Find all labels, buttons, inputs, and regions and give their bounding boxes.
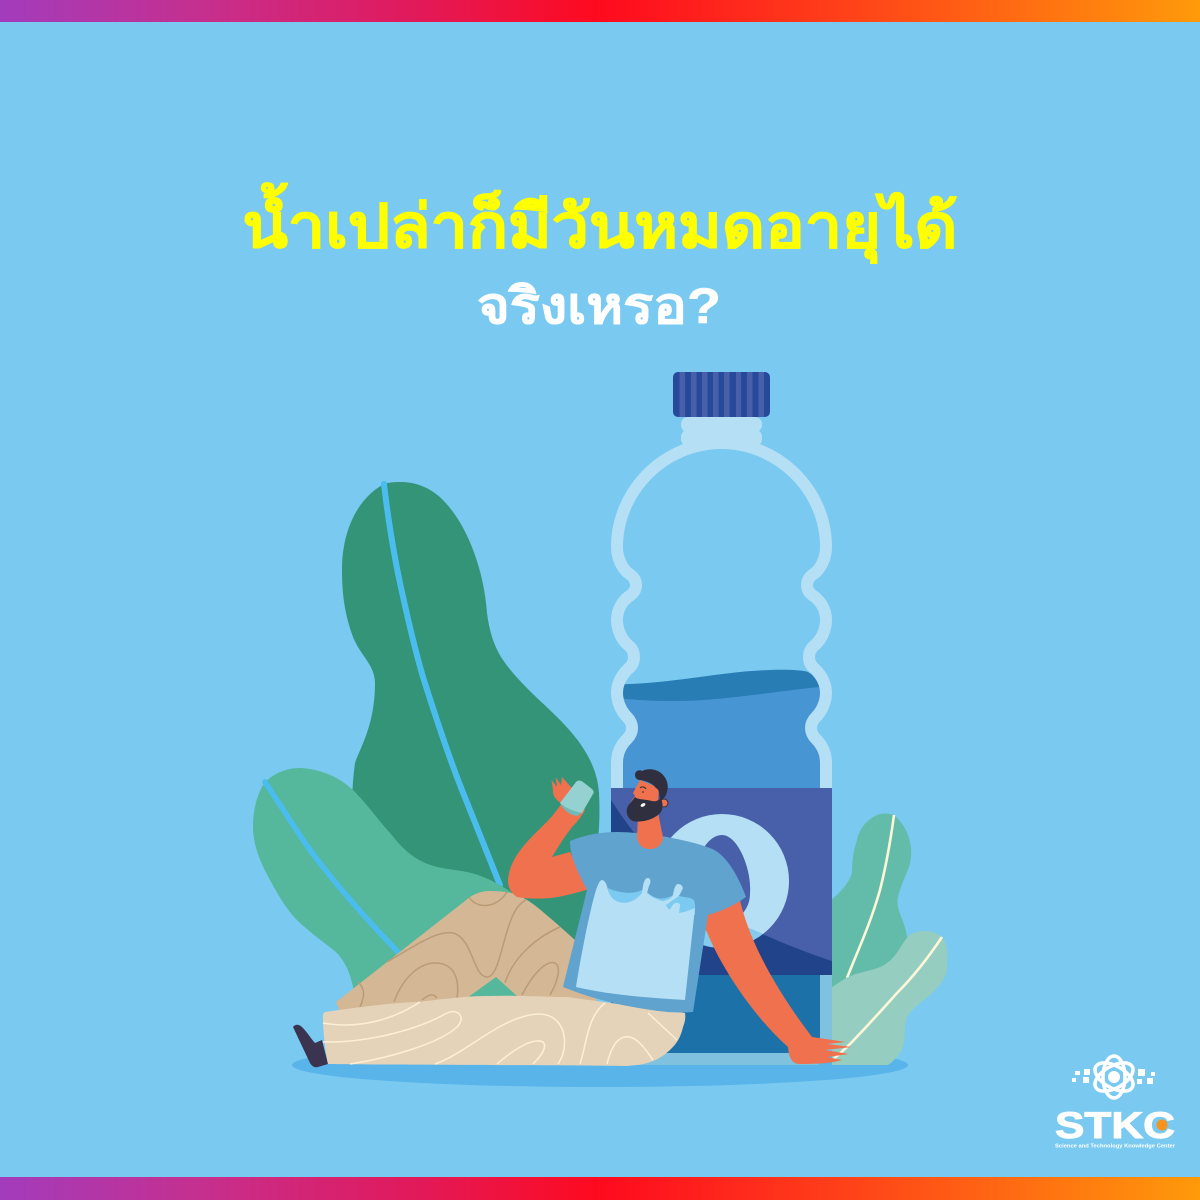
title: จริงเหรอ?	[477, 278, 721, 334]
front leg	[323, 996, 685, 1066]
other arm	[695, 900, 852, 1064]
title	[242, 182, 958, 334]
bottle base	[611, 975, 832, 1065]
leaf: large dark green	[342, 482, 599, 1000]
man drinking water	[253, 768, 852, 1067]
water bottle	[605, 372, 835, 1065]
leaf vein: right teal	[847, 815, 894, 978]
leaf vein: right pale	[827, 937, 942, 1065]
logo orange dot	[1156, 1120, 1168, 1130]
head	[627, 769, 668, 822]
front leg contour lines	[323, 1002, 677, 1064]
water in bottle	[623, 670, 820, 788]
bottle cap	[673, 372, 770, 417]
logo: STKC	[1055, 1056, 1176, 1150]
splash on shirt, back	[608, 888, 695, 915]
bottle label	[611, 788, 832, 975]
logo tagline: Science and Technology Knowledge Center	[1055, 1144, 1176, 1150]
illustration: ground shadow	[292, 1043, 908, 1087]
logo wordmark: STKC	[1055, 1105, 1175, 1146]
bottle outline	[617, 443, 826, 790]
t-shirt	[563, 832, 746, 1013]
back leg	[336, 891, 600, 1012]
green gap between legs	[467, 977, 517, 998]
cup	[560, 780, 594, 816]
raised arm	[508, 803, 590, 899]
leaf: light green	[253, 768, 520, 1000]
raised hand	[552, 777, 578, 812]
eye	[640, 787, 646, 792]
mouth	[640, 802, 646, 808]
back leg contour lines	[358, 892, 560, 1007]
face	[630, 780, 659, 803]
title: น้ำเปล่าก็มีวันหมดอายุได้	[242, 182, 958, 264]
leaf: right teal	[832, 814, 912, 987]
leaf vein: large leaf	[384, 484, 500, 885]
right plant	[825, 814, 947, 1065]
beard	[627, 797, 662, 822]
neck front over shirt	[637, 832, 663, 849]
neck	[637, 812, 663, 849]
logo icon: atom	[1090, 1056, 1138, 1098]
bottom gradient bar	[0, 1177, 1200, 1200]
top gradient bar	[0, 0, 1200, 22]
bottle neck rings	[681, 417, 762, 447]
ear	[660, 799, 668, 807]
hair	[635, 769, 668, 800]
foot	[293, 1025, 328, 1067]
leaf: right pale	[825, 931, 947, 1065]
logo pixels	[1072, 1069, 1155, 1084]
leaf vein: light green	[265, 782, 398, 952]
milk panel on shirt	[576, 878, 695, 1000]
water in bottle base	[611, 975, 820, 1053]
